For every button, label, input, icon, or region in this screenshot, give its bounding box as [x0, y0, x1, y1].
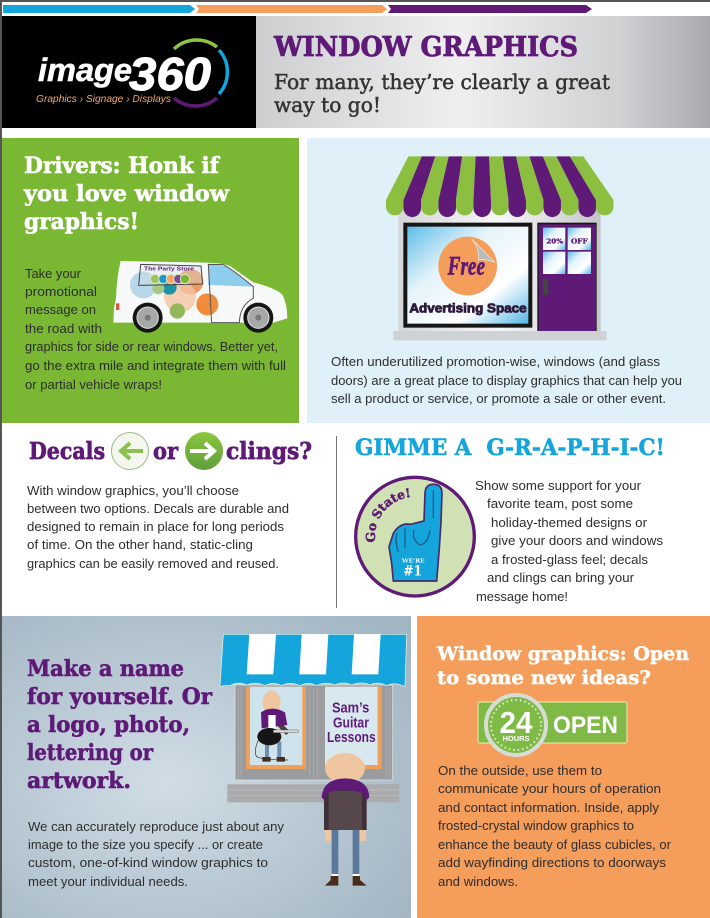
open text: and windows. — [438, 874, 518, 889]
decals text: of time. On the other hand, static-cling — [27, 537, 253, 552]
open text: On the outside, use them to — [438, 763, 602, 778]
drivers text: graphics for side or rear windows. Better yet, — [25, 339, 278, 354]
panel: storefront — [307, 138, 710, 423]
gimme text: give your doors and windows — [491, 533, 664, 548]
gimme text: message home! — [476, 589, 568, 604]
guitar shop illustration: Sam’s — [332, 701, 369, 717]
top ribbon bars — [3, 5, 592, 13]
icon: left arrow — [112, 432, 148, 470]
foam finger badge: #1 — [403, 564, 422, 580]
onlooker — [322, 753, 369, 886]
subtitle: way to go! — [274, 93, 381, 117]
open sign: HOURS — [502, 734, 530, 743]
open text: communicate your hours of operation — [438, 781, 661, 796]
make a name heading: lettering or — [27, 740, 153, 766]
title: WINDOW GRAPHICS — [273, 32, 578, 63]
make a name heading: a logo, photo, — [27, 712, 190, 738]
gimme text: favorite team, post some — [487, 496, 633, 511]
storefront illustration: Free — [447, 251, 485, 280]
guitarist — [255, 690, 298, 762]
gimme text: a frosted-glass feel; decals — [491, 552, 649, 567]
guitar shop illustration — [220, 634, 407, 886]
foam finger badge: Go State! — [366, 488, 410, 542]
decals heading: Decals — [29, 438, 105, 465]
open sign: OPEN — [553, 712, 618, 739]
open text: add wayfinding directions to doorways — [438, 855, 667, 870]
icon: right arrow — [185, 432, 223, 470]
storefront text: Often underutilized promotion-wise, windows (and glass — [331, 354, 661, 369]
foam finger badge: WE’RE — [401, 558, 425, 564]
open heading: to some new ideas? — [437, 667, 651, 689]
gimme text: and clings can bring your — [487, 570, 635, 585]
open sign — [478, 695, 627, 755]
decals text: graphics can be easily removed and reused. — [27, 556, 279, 571]
open heading: Window graphics: Open — [436, 643, 689, 665]
drivers text: the road with — [25, 321, 102, 336]
decals heading: clings? — [226, 438, 312, 465]
drivers heading: you love window — [23, 181, 230, 207]
drivers heading: graphics! — [24, 209, 139, 235]
storefront text: sell a product or service, or promote a sale or other event. — [331, 391, 666, 406]
make a name text: We can accurately reproduce just about any — [28, 819, 285, 834]
header title block — [256, 16, 710, 128]
header logo block — [2, 16, 256, 128]
van illustration — [113, 261, 287, 333]
decals text: With window graphics, you’ll choose — [27, 483, 239, 498]
logo tagline: Graphics › Signage › Displays — [36, 93, 172, 105]
drivers text: or partial vehicle wraps! — [25, 377, 162, 392]
logo ring — [174, 40, 227, 106]
gimme heading: GIMME A G-R-A-P-H-I-C! — [355, 435, 665, 461]
decals text: between two options. Decals are durable and — [27, 501, 289, 516]
drivers text: go the extra mile and integrate them with full — [25, 358, 286, 373]
decals heading: or — [153, 438, 179, 465]
open text: and contact information. Inside, apply — [438, 800, 660, 815]
make a name heading: artwork. — [27, 768, 131, 794]
make a name text: custom, one-of-kind window graphics to — [28, 855, 268, 870]
storefront illustration — [386, 156, 613, 340]
panel: decals or clings — [27, 432, 312, 571]
open sign: 24 — [500, 705, 533, 740]
gimme text: Show some support for your — [475, 478, 642, 493]
decals text: designed to remain in place for long periods — [27, 519, 285, 534]
logo number: 360 — [129, 48, 211, 100]
van illustration: The Party Store — [144, 267, 194, 273]
drivers text: promotional — [25, 284, 97, 299]
storefront text: doors) are a great place to display graphics that can help you — [331, 373, 682, 388]
storefront illustration: OFF — [571, 238, 588, 246]
storefront illustration: 20% — [546, 238, 564, 246]
panel: make a name — [2, 616, 411, 918]
logo wordmark: image — [38, 52, 132, 88]
make a name text: meet your individual needs. — [28, 874, 188, 889]
guitar shop illustration: Guitar — [333, 716, 369, 732]
drivers heading: Drivers: Honk if — [24, 153, 221, 179]
drivers text: message on — [25, 302, 96, 317]
open text: enhance the beauty of glass cubicles, or — [438, 837, 672, 852]
panel: gimme a graphic — [354, 435, 665, 604]
subtitle: For many, they’re clearly a great — [274, 70, 611, 94]
gimme text: holiday-themed designs or — [491, 515, 648, 530]
storefront illustration: Advertising Space — [409, 302, 527, 316]
panel: drivers — [2, 138, 299, 423]
decals heading — [29, 438, 312, 465]
foam finger badge — [354, 476, 476, 598]
drivers text: Take your — [25, 266, 82, 281]
make a name heading: for yourself. Or — [27, 684, 212, 710]
make a name heading: Make a name — [27, 656, 184, 682]
open text: frosted-crystal window graphics to — [438, 818, 634, 833]
make a name text: image to the size you specify ... or create — [28, 837, 263, 852]
guitar shop illustration: Lessons — [327, 730, 376, 746]
panel: open to new ideas — [417, 616, 710, 918]
